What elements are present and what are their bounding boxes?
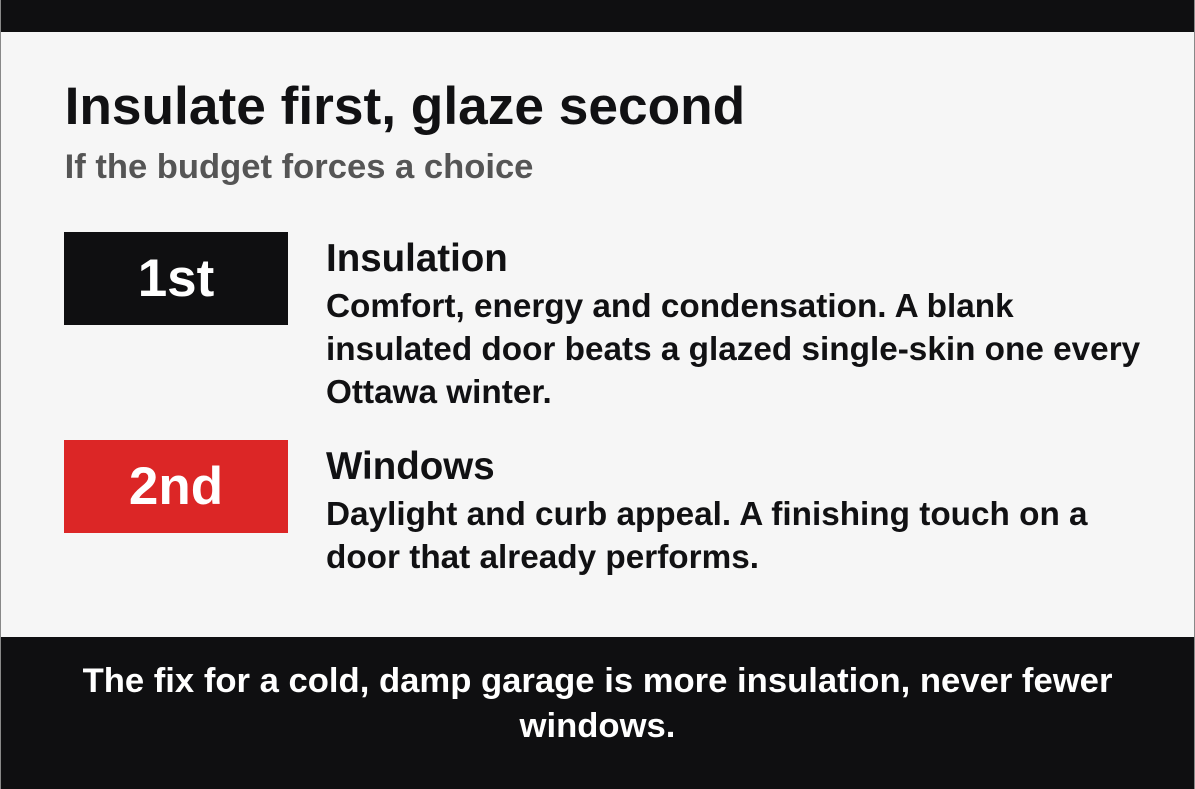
- rank badge: 2nd: 2nd: [129, 457, 223, 516]
- item text: insulation: [326, 288, 1140, 411]
- subtitle: If the budget forces a choice: [65, 148, 533, 186]
- item: windows: [326, 445, 1088, 576]
- item text: windows: Daylight and curb appeal. A finishing touch on a: [326, 496, 1088, 533]
- item: insulation: [326, 237, 1140, 411]
- item heading: insulation: Insulation: [326, 237, 508, 280]
- item text: insulation: insulated door beats a glazed single-skin one every: [326, 331, 1140, 368]
- footer takeaway text: [83, 662, 1112, 745]
- footer takeaway text: windows.: [520, 707, 675, 745]
- item text: insulation: Ottawa winter.: [326, 374, 552, 411]
- item heading: windows: Windows: [326, 445, 495, 488]
- item text: windows: door that already performs.: [326, 539, 759, 576]
- footer band: [0, 637, 1195, 789]
- rank badge: 2nd: [64, 440, 288, 533]
- footer takeaway text: The fix for a cold, damp garage is more insulation, never fewer: [83, 662, 1112, 700]
- rank badge: 1st: [64, 232, 288, 325]
- title: Insulate first, glaze second: [65, 77, 745, 136]
- item text: insulation: Comfort, energy and condensation. A blank: [326, 288, 1014, 325]
- rank badge: 1st: 1st: [138, 249, 214, 308]
- item text: windows: [326, 496, 1088, 576]
- top band: [0, 0, 1195, 32]
